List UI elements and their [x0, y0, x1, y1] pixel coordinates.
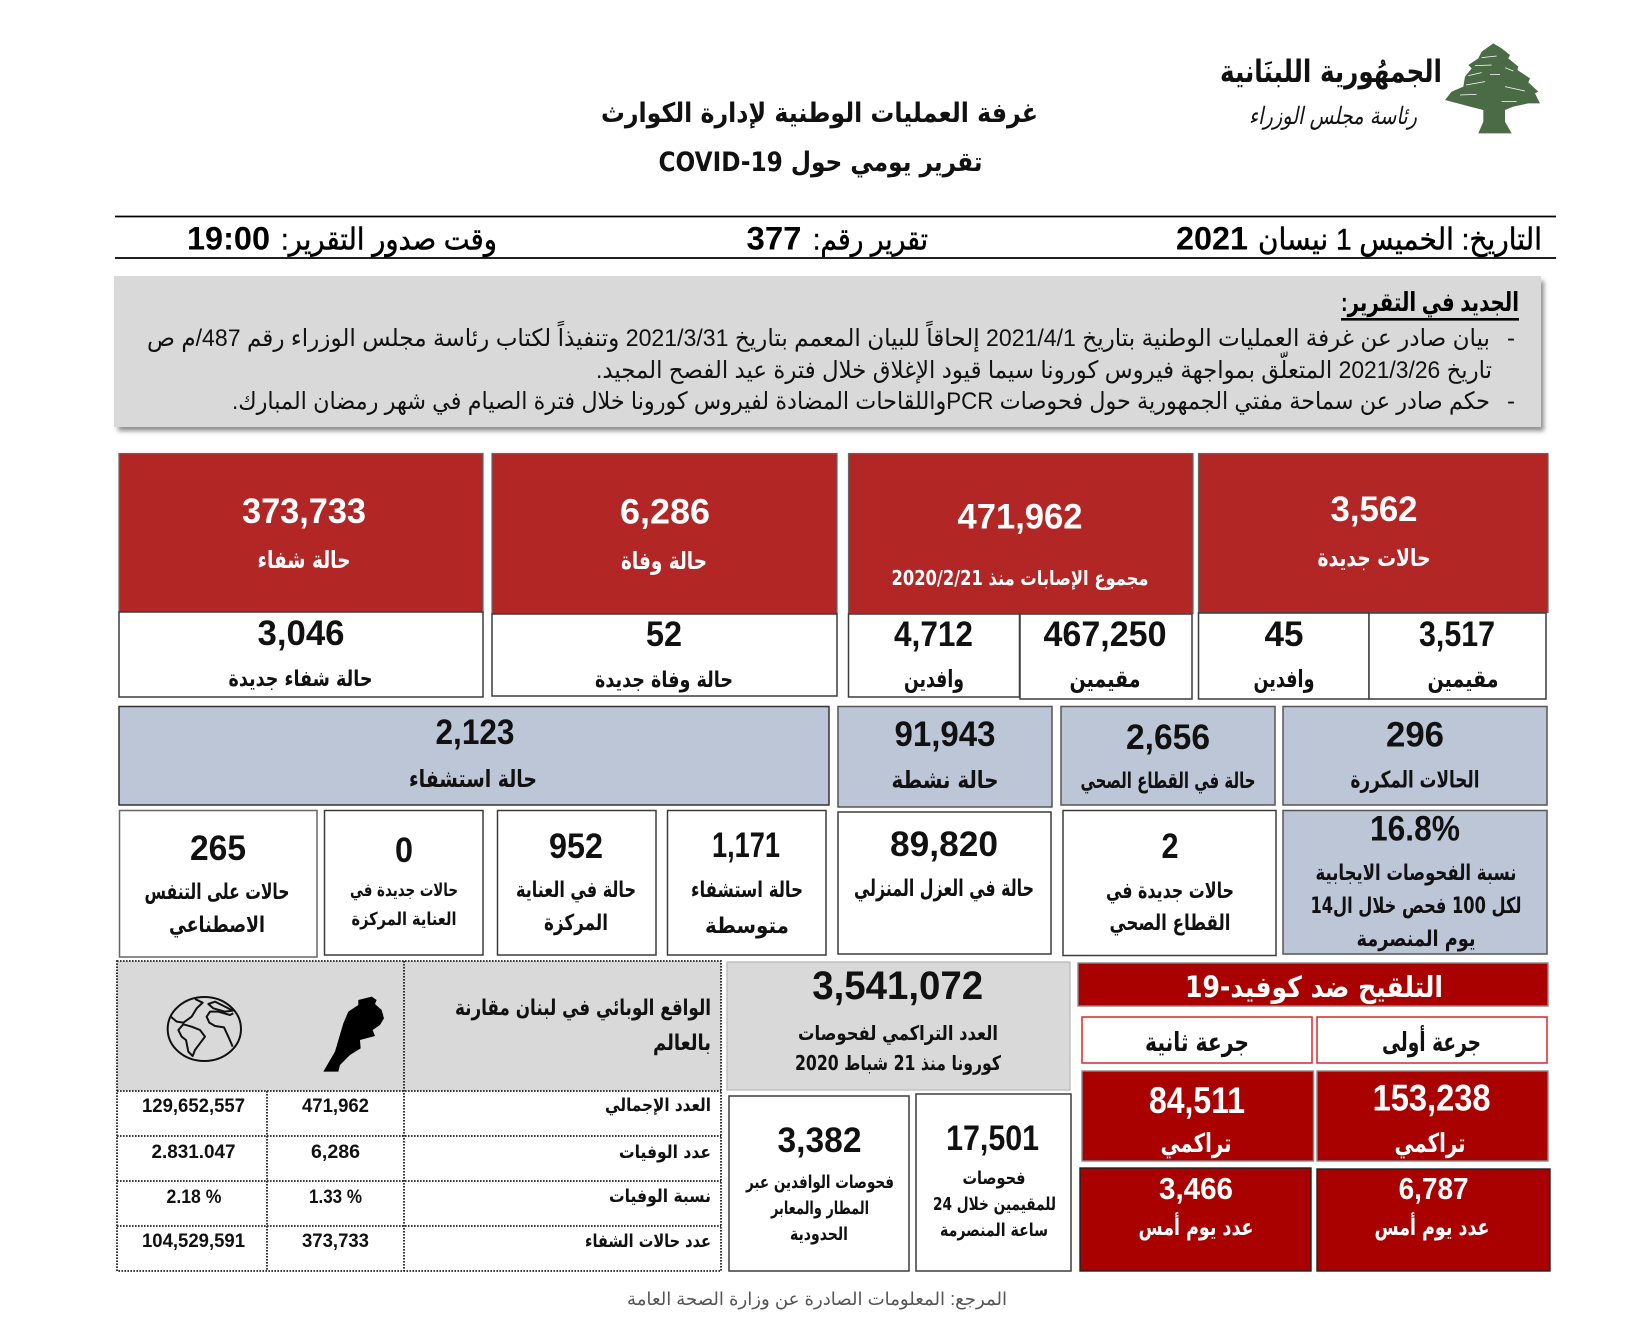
text: presidency of the council: رئاسة مجلس الوزراء — [1249, 102, 1417, 130]
value: 2,123 — [436, 713, 514, 752]
panel: ventilated: الاصطناعي — [169, 913, 265, 938]
label: residents: مقيمين — [1070, 665, 1140, 693]
first dose yesterday: عدد يوم أمس — [1374, 1211, 1490, 1241]
world values: 2.18 % — [166, 1187, 222, 1208]
heading: الجديد في التقرير: — [1341, 287, 1519, 318]
label: total cases since date: مجموع الإصابات منذ 2020/2/21 — [892, 566, 1148, 590]
first dose cumulative: تراكمي — [1394, 1129, 1466, 1159]
report number — [746, 220, 928, 258]
label: recoveries: حالة شفاء — [258, 546, 350, 574]
panel: ICU: المركزة — [544, 911, 608, 936]
logo: Lebanese Republic cedar and calligraphy — [1220, 43, 1540, 133]
value: new arrivals: 45 — [1264, 615, 1304, 654]
value: 952 — [549, 827, 603, 866]
label: حالات جديدة في — [350, 880, 458, 901]
label: new deaths: حالة وفاة جديدة — [595, 668, 733, 693]
date: 2021 — [1176, 220, 1248, 256]
value: 265 — [190, 829, 246, 868]
table: Lebanon vs world — [117, 961, 721, 1271]
value: residents total: 467,250 — [1044, 615, 1166, 654]
value: 0 — [395, 831, 413, 870]
panel: home isolation — [838, 812, 1051, 954]
vaccination header — [1078, 963, 1548, 1006]
label: حالة استشفاء — [409, 765, 537, 793]
label: حالة نشطة — [892, 766, 998, 794]
label: حالة استشفاء — [691, 878, 803, 903]
label: deaths: حالة وفاة — [621, 547, 707, 575]
report number: تقرير رقم: — [813, 224, 928, 258]
value: 2,656 — [1126, 718, 1210, 757]
label: arrivals: وافدين — [904, 665, 964, 693]
text: republic name: الجمهُورية اللبنَانية — [1220, 54, 1442, 90]
second dose yesterday: عدد يوم أمس — [1138, 1211, 1254, 1241]
row labels: عدد الوفيات — [619, 1142, 711, 1163]
label: حالات جديدة في — [1106, 879, 1234, 904]
subtitle: تقرير يومي حول COVID-19 — [659, 147, 982, 178]
heading — [455, 996, 711, 1056]
label: نسبة الفحوصات الايجابية — [1316, 861, 1516, 886]
value: total recoveries: 373,733 — [242, 492, 366, 531]
value: expatriates total: 4,712 — [894, 615, 973, 654]
panel: moderate hospital: متوسطة — [705, 914, 789, 939]
Lebanon values — [302, 1096, 369, 1252]
bullet text: - — [1507, 325, 1515, 352]
date: التاريخ: الخميس 1 نيسان — [1258, 224, 1542, 258]
panel: new cases — [1198, 454, 1548, 699]
value: 3,541,072 — [812, 964, 983, 1008]
value: new residents: 3,517 — [1419, 615, 1495, 654]
value: new recoveries: 3,046 — [258, 614, 344, 653]
report meta strip — [115, 216, 1556, 258]
panel: new health sector — [1063, 810, 1276, 956]
label: new recoveries: حالة شفاء جديدة — [228, 667, 372, 692]
label: فحوصات الوافدين عبر — [745, 1172, 894, 1193]
report time: وقت صدور التقرير: — [281, 224, 497, 258]
icon: globe — [168, 997, 241, 1061]
value: 3,382 — [778, 1121, 862, 1160]
value: new deaths: 52 — [646, 615, 682, 654]
panel: deaths — [492, 454, 837, 696]
panel: new in the report — [114, 276, 1544, 431]
first dose cumulative — [1317, 1071, 1548, 1161]
label: حالة في العزل المنزلي — [854, 876, 1034, 902]
world values: 104,529,591 — [142, 1231, 245, 1252]
row labels — [585, 1095, 711, 1252]
row labels: نسبة الوفيات — [609, 1186, 711, 1207]
bullet text: حكم صادر عن سماحة مفتي الجمهورية حول فحوصات PCRواللقاحات المضادة لفيروس كورونا خلال فترة الصيام في شهر رمضان المبارك. — [232, 388, 1490, 415]
icon: cedar tree — [1445, 43, 1540, 133]
value: new cases: 3,562 — [1330, 490, 1418, 529]
second dose yesterday: 3,466 — [1159, 1171, 1233, 1206]
panel: new ICU — [324, 810, 483, 955]
first dose header: جرعة أولى — [1382, 1025, 1481, 1058]
world values — [142, 1096, 245, 1252]
value: 91,943 — [894, 715, 996, 754]
report time — [187, 220, 497, 258]
label: الحالات المكررة — [1350, 768, 1480, 794]
Lebanon values: 471,962 — [302, 1096, 369, 1117]
panel: arrivals tests: الحدودية — [790, 1224, 848, 1245]
source note: المرجع: المعلومات الصادرة عن وزارة الصحة العامة — [627, 1289, 1007, 1310]
panel: positivity rate: لكل 100 فحص خلال ال14 — [1310, 894, 1522, 919]
second dose cumulative: 84,511 — [1149, 1080, 1245, 1121]
Lebanon values: 373,733 — [302, 1231, 369, 1252]
panel: new ICU: العناية المركزة — [352, 909, 456, 930]
row labels: العدد الإجمالي — [605, 1095, 711, 1116]
world values: 2.831.047 — [152, 1142, 236, 1163]
panel: active cases — [838, 706, 1052, 807]
heading: الواقع الوبائي في لبنان مقارنة — [455, 996, 711, 1021]
label: حالة في القطاع الصحي — [1080, 769, 1256, 794]
bullet text — [147, 321, 1515, 415]
first dose yesterday — [1317, 1169, 1550, 1271]
row labels: عدد حالات الشفاء — [585, 1231, 711, 1252]
label: residents: مقيمين — [1428, 665, 1498, 693]
value: total deaths: 6,286 — [620, 492, 710, 532]
panel: cumulative tests — [727, 962, 1070, 1090]
bullet text: بيان صادر عن غرفة العمليات الوطنية بتاريخ 2021/4/1 إلحاقاً للبيان المعمم بتاريخ 2021/3/31 وتنفيذاً لكتاب رئاسة مجلس الوزراء رقم 487/م ص — [147, 321, 1490, 353]
panel: hospitalised — [119, 706, 829, 805]
date — [1176, 220, 1542, 258]
label: العدد التراكمي لفحوصات — [798, 1021, 998, 1046]
label: فحوصات — [962, 1168, 1026, 1189]
label: حالة في العناية — [516, 878, 636, 903]
title: غرفة العمليات الوطنية لإدارة الكوارث — [601, 98, 1038, 129]
value: 1,171 — [712, 826, 780, 865]
bullet text: تاريخ 2021/3/26 المتعلّق بمواجهة فيروس كورونا سيما قيود الإغلاق خلال فترة عيد الفصح المجيد. — [596, 352, 1492, 384]
panel: ICU — [498, 810, 656, 955]
report number: 377 — [746, 220, 802, 256]
first dose header — [1317, 1017, 1547, 1063]
Lebanon values: 1.33 % — [309, 1187, 362, 1208]
title — [601, 98, 1038, 178]
first dose cumulative: 153,238 — [1373, 1078, 1491, 1118]
panel: cumulative tests: كورونا منذ 21 شباط 2020 — [795, 1051, 1001, 1075]
Lebanon values: 6,286 — [311, 1142, 360, 1163]
label: arrivals: وافدين — [1254, 665, 1314, 693]
first dose yesterday: 6,787 — [1399, 1171, 1469, 1206]
value: 17,501 — [946, 1119, 1039, 1158]
second dose cumulative — [1082, 1071, 1314, 1161]
panel: vaccination — [1078, 963, 1550, 1271]
panel: total cases — [848, 454, 1193, 699]
value: 16.8% — [1370, 810, 1460, 848]
panel: resident tests: للمقيمين خلال 24 — [933, 1194, 1056, 1215]
panel: positivity rate: يوم المنصرمة — [1356, 927, 1476, 952]
heading: بالعالم — [653, 1031, 711, 1056]
value: 296 — [1386, 716, 1444, 754]
value: 89,820 — [890, 825, 998, 864]
panel: recoveries — [119, 454, 483, 697]
second dose yesterday — [1080, 1168, 1311, 1271]
label: new cases: حالات جديدة — [1318, 544, 1430, 572]
second dose cumulative: تراكمي — [1160, 1129, 1232, 1159]
world values: 129,652,557 — [142, 1096, 245, 1117]
icon: Lebanon map — [323, 997, 384, 1072]
vaccination header: التلقيح ضد كوفيد-19 — [1185, 970, 1443, 1004]
second dose header: جرعة ثانية — [1145, 1028, 1249, 1058]
value: total cases: 471,962 — [958, 498, 1082, 536]
panel: ventilated — [120, 810, 317, 957]
value: 2 — [1162, 827, 1178, 866]
panel: resident tests — [916, 1094, 1071, 1271]
panel: arrivals tests — [729, 1096, 909, 1271]
report time: 19:00 — [187, 220, 270, 256]
panel: moderate hospital — [668, 810, 826, 955]
panel: resident tests: ساعة المنصرمة — [940, 1220, 1048, 1241]
bullet text: - — [1507, 388, 1515, 415]
panel: new health sector: القطاع الصحي — [1110, 911, 1230, 936]
second dose header — [1082, 1017, 1312, 1063]
panel: arrivals tests: المطار والمعابر — [770, 1198, 869, 1219]
panel: health sector cases — [1061, 706, 1275, 805]
panel: positivity rate — [1283, 810, 1547, 954]
panel: repeated cases — [1283, 706, 1547, 805]
label: حالات على التنفس — [144, 880, 290, 905]
